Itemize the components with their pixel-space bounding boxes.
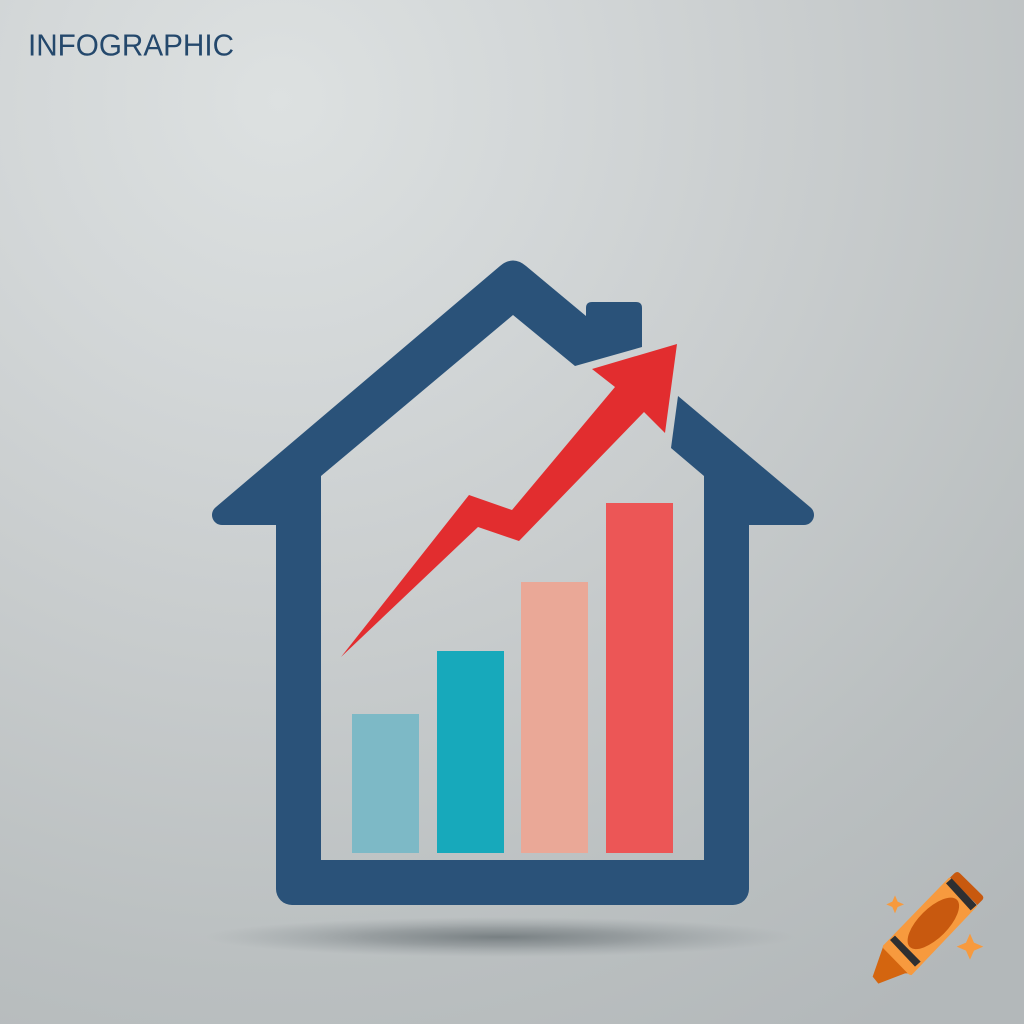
large sparkle xyxy=(957,934,983,960)
bar 4 xyxy=(606,503,673,853)
crayon label oval xyxy=(899,889,967,957)
crayon bottom stripe xyxy=(890,936,921,967)
crayon body xyxy=(883,877,977,975)
bar 3 xyxy=(521,582,588,853)
bar chart xyxy=(352,503,673,853)
title: INFOGRAPHIC xyxy=(28,28,234,62)
crayon cap xyxy=(950,872,983,905)
house outline xyxy=(212,260,814,905)
small sparkle xyxy=(886,895,904,913)
ground shadow xyxy=(205,917,795,957)
icon: crayon with sparkles xyxy=(873,872,983,984)
rising red arrow xyxy=(341,344,677,657)
crayon top stripe xyxy=(946,878,977,910)
bar 2 xyxy=(437,651,504,853)
bar 1 xyxy=(352,714,419,853)
crayon tip xyxy=(873,946,912,984)
